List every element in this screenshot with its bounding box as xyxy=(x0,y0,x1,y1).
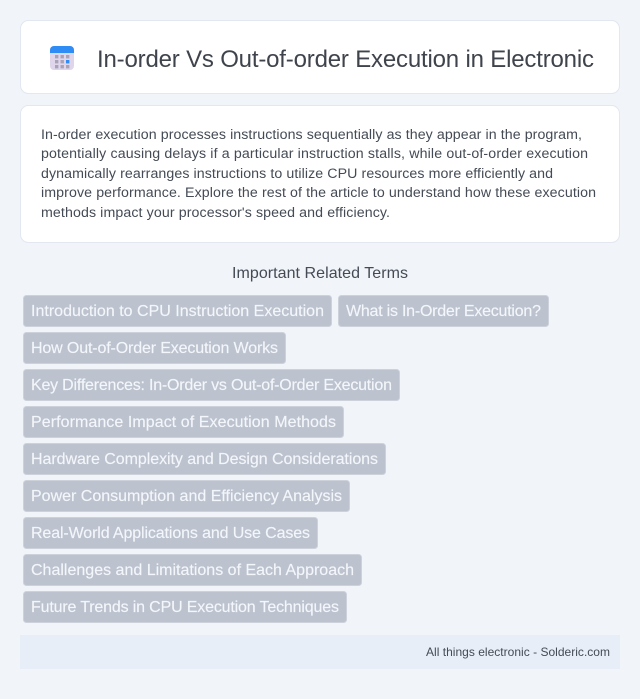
text block: introduction paragraph: methods impact your processor's speed and efficiency. xyxy=(41,205,390,221)
chip: power: Power Consumption and Efficiency Analysis xyxy=(31,488,342,505)
text block: introduction paragraph: dynamically rearranges instructions to utilize CPU resources more efficiently and xyxy=(41,166,553,182)
title: In-order Vs Out-of-order Execution in Electronic xyxy=(97,46,594,73)
chip: introduction: Introduction to CPU Instruction Execution xyxy=(31,303,324,320)
text block: introduction paragraph: potentially causing delays if a particular instruction stalls, while out-of-order execution xyxy=(41,146,588,162)
text block: introduction paragraph xyxy=(41,127,596,221)
chip: power xyxy=(24,480,350,512)
text block: introduction paragraph: In-order execution processes instructions sequentially as they appear in the program, xyxy=(41,127,582,143)
chip: performance xyxy=(24,406,344,438)
chip: key differences xyxy=(24,370,400,400)
chip: challenges: Challenges and Limitations of Each Approach xyxy=(31,562,354,579)
chip: in-order xyxy=(338,296,548,326)
chip: hardware: Hardware Complexity and Design Considerations xyxy=(31,451,378,468)
heading: important related terms: Important Related Terms xyxy=(232,265,408,282)
panel: introduction xyxy=(20,106,620,242)
text block: introduction paragraph: improve performance. Explore the rest of the article to understand how these execution xyxy=(41,185,596,201)
panel: title header xyxy=(20,20,620,94)
footer xyxy=(20,635,620,669)
chip: future trends: Future Trends in CPU Execution Techniques xyxy=(31,599,339,616)
chip: in-order: What is In-Order Execution? xyxy=(346,303,541,320)
chip: performance: Performance Impact of Execution Methods xyxy=(31,414,336,431)
chip: out-of-order: How Out-of-Order Execution Works xyxy=(31,340,278,357)
chip: hardware xyxy=(24,444,386,474)
footer credit: All things electronic - Solderic.com xyxy=(426,645,610,659)
icon: calendar xyxy=(50,46,74,70)
chip: applications xyxy=(24,518,318,548)
chip: future trends xyxy=(24,592,346,622)
chip: out-of-order xyxy=(24,332,286,364)
chip: challenges xyxy=(24,554,362,586)
chip: introduction xyxy=(24,296,332,326)
chip: applications: Real-World Applications and Use Cases xyxy=(31,525,310,542)
list: related term chips xyxy=(24,296,548,622)
chip: key differences: Key Differences: In-Order vs Out-of-Order Execution xyxy=(31,377,392,394)
